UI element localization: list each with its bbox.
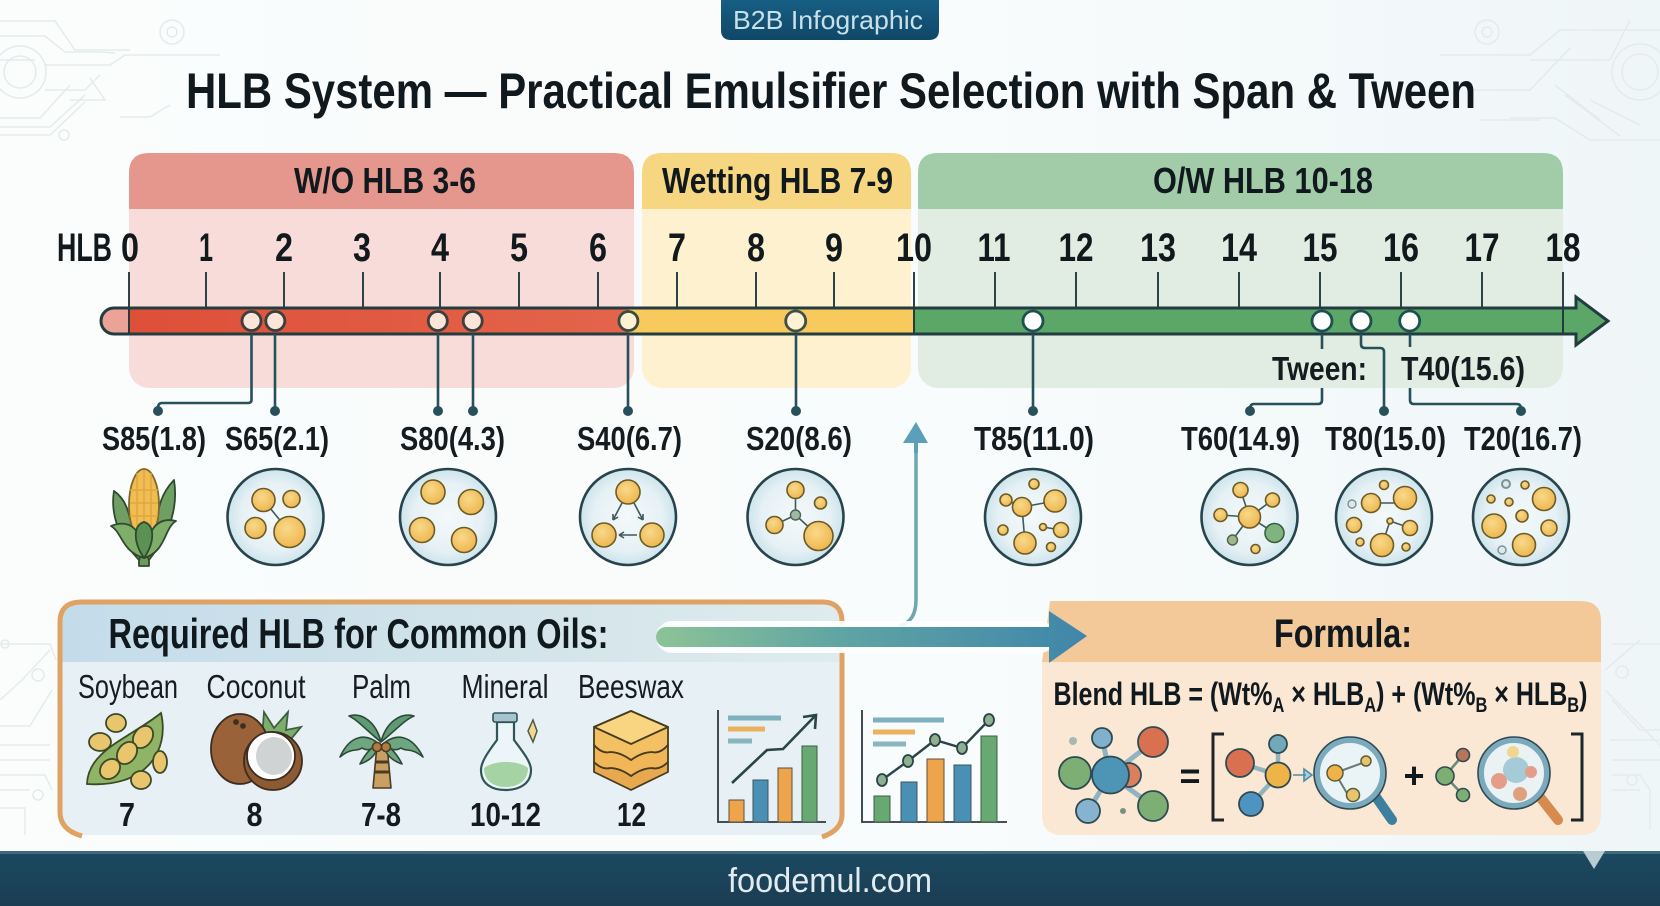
badge: B2B Infographic [721,0,939,40]
icon: beeswax [594,711,668,790]
icon: T60 droplets [1202,469,1298,565]
emulsifier labels: S85(1.8) [102,420,206,457]
icon: soybean [87,713,167,789]
mini chart 2 [862,710,1007,822]
oil names: Beeswax [578,668,684,705]
HLB axis labels: 5 [510,226,528,270]
HLB axis labels: 9 [825,226,843,270]
zone: O/W HLB 10-18: O/W HLB 10-18 [1153,160,1373,201]
icon: palm tree [340,715,423,788]
HLB axis labels: 15 [1302,226,1338,270]
HLB axis labels: 1 [199,226,213,270]
panel heading: Required HLB for Common Oils: [108,610,608,657]
emulsifier labels: T20(16.7) [1464,420,1582,457]
icon: S20 droplets [748,469,844,565]
icon: S80 droplets [400,469,496,565]
emulsifier labels: T80(15.0) [1325,420,1446,457]
oil values: 10-12 [470,796,541,833]
icon: S40 droplets [580,469,676,565]
zone: W/O HLB 3-6: W/O HLB 3-6 [294,160,476,201]
equals sign: = [1179,755,1201,796]
panel: required HLB for common oils [60,602,842,837]
formula heading: Formula: [1274,612,1412,656]
oil values: 7 [119,796,135,833]
zone: O/W HLB 10-18 [918,153,1563,388]
oil values: 7-8 [361,796,401,833]
HLB axis labels: 6 [589,226,607,270]
icon: T80 droplets [1336,469,1432,565]
HLB axis labels: 2 [275,226,293,270]
footer url: foodemul.com [728,862,932,900]
HLB axis labels: 11 [978,226,1010,270]
icon: S65 droplets [228,469,324,565]
emulsifier labels: T85(11.0) [974,420,1094,457]
axis ticks [129,272,1563,334]
HLB axis labels: 3 [353,226,371,270]
oil values [119,796,646,833]
blend formula: × HLB [1487,676,1567,712]
blend formula: × HLB [1284,676,1364,712]
panel: formula [1042,601,1601,835]
T40 label: T40(15.6) [1401,350,1525,387]
icon: T85 droplets [985,469,1081,565]
oil names: Mineral [462,668,548,705]
icon: molecule A [1226,735,1312,816]
emulsifier labels: S65(2.1) [225,420,329,457]
HLB axis labels: 0 [121,226,139,270]
blend formula: ) + (Wt% [1376,676,1475,712]
oil names: Palm [352,668,411,705]
oil values: 12 [617,796,646,833]
emulsifier labels: S80(4.3) [400,420,505,457]
blend formula: ) [1579,676,1588,712]
blend formula: A [1272,694,1284,717]
HLB axis labels: 13 [1140,226,1176,270]
icon: T20 droplets [1473,469,1569,565]
blend formula: A [1364,694,1376,717]
HLB axis labels: 12 [1058,226,1094,270]
oil names [78,668,684,705]
plus sign: + [1403,755,1425,796]
blend formula: Blend HLB = (Wt% [1054,676,1333,712]
footer [0,851,1660,906]
arrow: big gradient arrow to formula [656,611,1087,663]
leader lines [153,334,1526,416]
emulsifier labels: T60(14.9) [1181,420,1300,457]
Tween label: Tween: [1272,350,1367,387]
icon: magnifier B [1478,737,1558,820]
scale markers [242,311,1420,331]
emulsifier labels [102,420,1582,457]
zone: Wetting HLB 7-9: Wetting HLB 7-9 [662,160,893,201]
brackets [1213,734,1582,820]
HLB axis labels: 4 [431,226,450,270]
HLB axis labels [57,226,1580,270]
icon: blended molecule [1059,727,1168,823]
icon: magnifier A [1314,737,1392,820]
blend formula: B [1475,694,1487,717]
HLB axis labels: 14 [1221,226,1258,270]
icon: mineral oil flask [481,713,537,790]
HLB axis labels: 16 [1383,226,1419,270]
emulsifier labels: S20(8.6) [746,420,852,457]
mini chart 1 [718,710,826,822]
zone: W/O HLB 3-6 [129,153,634,388]
HLB axis labels: 10 [896,226,932,270]
oil names: Soybean [78,668,178,705]
icon: coconut [211,712,302,790]
blend formula: B [1567,694,1579,717]
zone: Wetting HLB 7-9 [642,153,911,388]
oil names: Coconut [206,668,306,705]
HLB axis labels: 18 [1546,226,1580,270]
HLB axis labels: 7 [668,226,686,270]
emulsifier labels: S40(6.7) [577,420,682,457]
HLB axis labels: 8 [747,226,765,270]
HLB axis labels: HLB [57,226,112,270]
HLB scale bar arrow [101,297,1608,345]
oil values: 8 [246,796,262,833]
HLB axis labels: 17 [1464,226,1500,270]
icon: molecule B [1436,748,1470,802]
badge: B2B Infographic: B2B Infographic [733,5,923,35]
icon: corn [111,469,176,566]
arrow: teal connector up [899,422,928,626]
